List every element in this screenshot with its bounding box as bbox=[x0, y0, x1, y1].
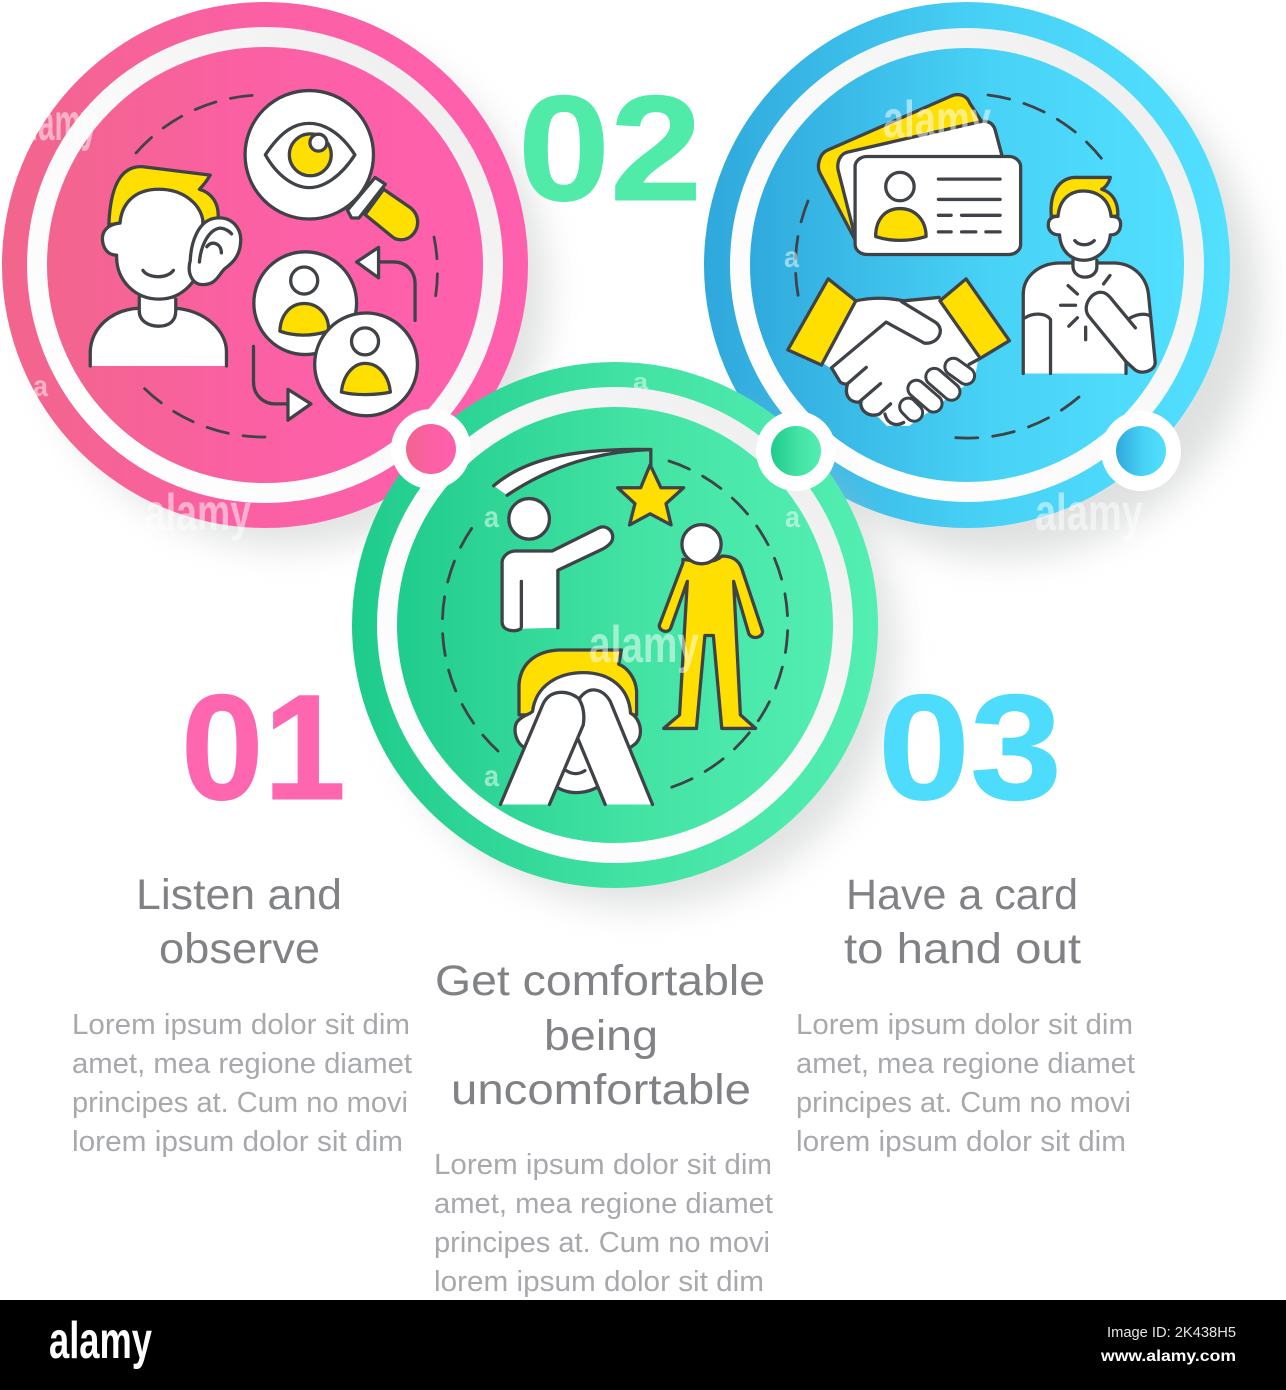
watermarks bbox=[30, 91, 1143, 793]
icon: crouching person hiding face bbox=[500, 650, 653, 804]
heading: listen and observe bbox=[136, 871, 342, 973]
watermarks: alamy bbox=[883, 91, 991, 149]
panel: blue circle bbox=[704, 2, 1260, 558]
heading: get comfortable being uncomfortable: being bbox=[544, 1012, 658, 1060]
icon: magnifier with eye bbox=[245, 91, 418, 240]
text block: column 1: amet, mea regione diamet bbox=[72, 1048, 412, 1080]
heading: have a card to hand out bbox=[844, 871, 1081, 973]
marker: pink dot bbox=[391, 409, 471, 489]
watermarks: a bbox=[785, 501, 800, 534]
text block: column 2: lorem ipsum dolor sit dim bbox=[434, 1266, 764, 1298]
icon: dashed orbit green bbox=[442, 461, 788, 791]
icon: man with hand on chest bbox=[1023, 177, 1155, 373]
panel: pink circle bbox=[2, 2, 548, 548]
text block: column 1: principes at. Cum no movi bbox=[72, 1087, 408, 1119]
footer logo: alamy bbox=[49, 1312, 152, 1370]
text block: column 2: amet, mea regione diamet bbox=[434, 1188, 773, 1220]
text block: column 3: amet, mea regione diamet bbox=[796, 1048, 1135, 1080]
watermarks: alamy bbox=[589, 616, 699, 674]
text block: column 3: lorem ipsum dolor sit dim bbox=[796, 1126, 1126, 1158]
watermarks: alamy bbox=[1035, 484, 1143, 542]
text block: column 3: principes at. Cum no movi bbox=[796, 1087, 1131, 1119]
watermarks: a bbox=[633, 369, 649, 394]
text block: column 2 bbox=[434, 1149, 773, 1298]
number 02: 02 bbox=[518, 64, 702, 232]
marker: blue dot bbox=[1101, 411, 1181, 491]
text block: column 1: lorem ipsum dolor sit dim bbox=[72, 1126, 403, 1158]
heading: listen and observe: Listen and bbox=[136, 871, 342, 919]
heading: listen and observe: observe bbox=[159, 925, 320, 973]
icon: handshake bbox=[788, 279, 1009, 426]
watermarks: a bbox=[784, 241, 799, 274]
number 03: 03 bbox=[878, 663, 1062, 831]
marker: green dot bbox=[756, 411, 836, 491]
image id: Image ID: 2K438H5 bbox=[1107, 1325, 1236, 1341]
text block: column 3: Lorem ipsum dolor sit dim bbox=[796, 1009, 1133, 1041]
watermarks: a bbox=[484, 760, 499, 793]
icon: standing yellow person bbox=[659, 525, 763, 728]
icon: exchanging people with arrows bbox=[254, 247, 417, 420]
heading: have a card to hand out: Have a card bbox=[846, 871, 1078, 919]
icon: dashed orbit blue bbox=[795, 95, 1105, 438]
website: www.alamy.com bbox=[1100, 1348, 1236, 1365]
text block: column 2: principes at. Cum no movi bbox=[434, 1227, 770, 1259]
number 01: 01 bbox=[181, 663, 346, 831]
text block: column 3 bbox=[796, 1009, 1135, 1158]
text block: column 1 bbox=[72, 1009, 412, 1158]
icon: dashed orbit pink bbox=[136, 95, 437, 437]
watermarks: a bbox=[33, 370, 48, 403]
watermarks: a bbox=[484, 501, 499, 534]
watermarks: lamy bbox=[30, 94, 97, 152]
icon: person pointing at star bbox=[494, 449, 684, 631]
panel: green circle bbox=[352, 362, 898, 908]
text block: column 1: Lorem ipsum dolor sit dim bbox=[72, 1009, 410, 1041]
heading: get comfortable being uncomfortable: uncomfortable bbox=[451, 1066, 751, 1114]
icon: business cards bbox=[818, 95, 1021, 255]
footer bar bbox=[0, 1300, 1286, 1390]
text block: column 2: Lorem ipsum dolor sit dim bbox=[434, 1149, 772, 1181]
heading: get comfortable being uncomfortable bbox=[435, 957, 765, 1114]
watermarks: alamy bbox=[145, 484, 251, 542]
heading: get comfortable being uncomfortable: Get comfortable bbox=[435, 957, 765, 1005]
icon: man listening with ear bbox=[90, 167, 241, 366]
heading: have a card to hand out: to hand out bbox=[844, 925, 1081, 973]
